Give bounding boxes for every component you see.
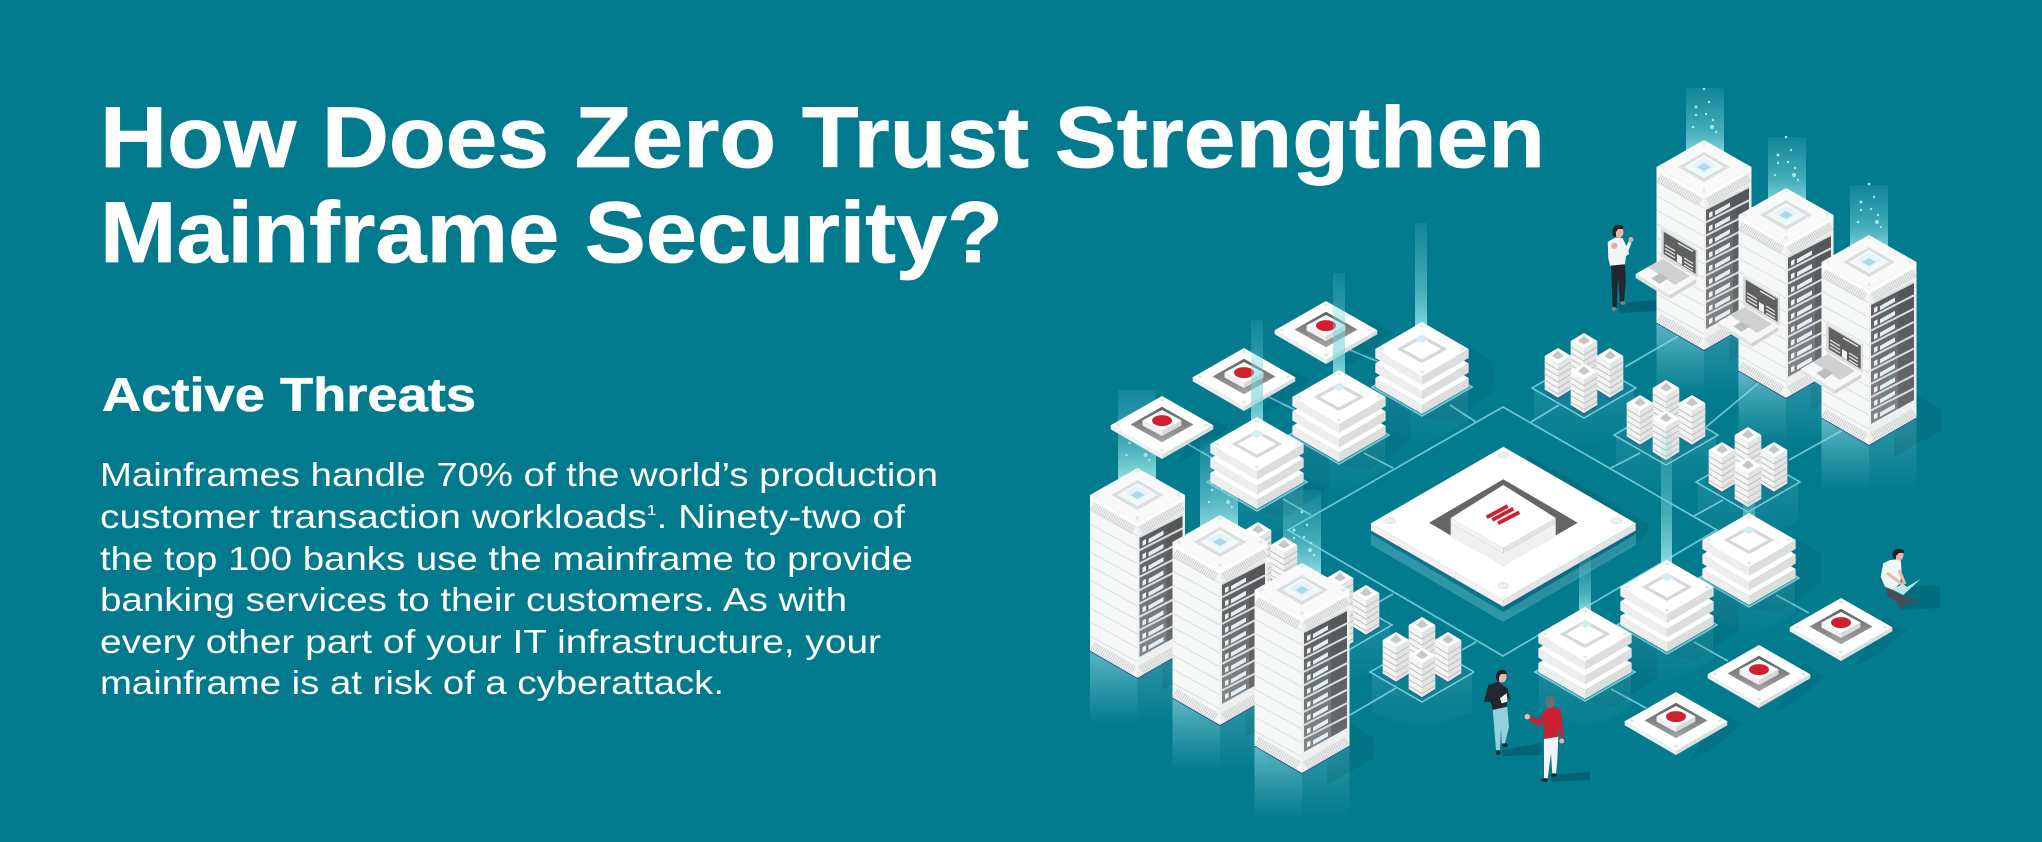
server stack E (1617, 560, 1739, 685)
mini server cluster 2 (1614, 380, 1718, 495)
light beams above right stacks (1661, 432, 1755, 567)
person in black sweater (1484, 670, 1542, 756)
title: Mainframe Security? (100, 185, 1003, 281)
body text: every other part of your IT infrastructure, your (100, 624, 881, 661)
red button tile 2 (1193, 348, 1310, 416)
title: How Does Zero Trust Strengthen (100, 90, 1545, 186)
red button tile 1 (1275, 301, 1392, 369)
mini server cluster 4 (1370, 617, 1474, 732)
body text: . Ninety-two of (656, 499, 906, 536)
light beam above stack C (1251, 320, 1263, 430)
mini server cluster 1 (1532, 333, 1636, 448)
mini server cluster 6 (1206, 522, 1310, 637)
body text (100, 457, 938, 702)
tower reflections (1090, 323, 1916, 818)
light beams above lower towers (1118, 390, 1321, 575)
red button tile 4 (1790, 598, 1907, 666)
person in red sweater (1524, 696, 1590, 782)
mini server cluster 5 (1288, 570, 1392, 685)
server tower 4 (1090, 468, 1210, 690)
red button tile 3 (1111, 396, 1228, 464)
server stack F (1535, 607, 1657, 732)
mini server cluster 3 (1696, 427, 1800, 542)
server tower 5 (1172, 515, 1292, 737)
server stack D (1699, 513, 1821, 638)
server tower 6 (1254, 563, 1374, 785)
light beam above stack B (1333, 273, 1345, 383)
server tower 2 (1718, 188, 1858, 410)
red button tile 6 (1625, 692, 1742, 760)
isometric data-center illustration (1090, 88, 1941, 818)
server stack C (1207, 417, 1329, 542)
server tower 3 (1801, 235, 1941, 457)
title (100, 90, 1545, 281)
circuit traces (1186, 335, 1843, 715)
body text: the top 100 banks use the mainframe to provide (100, 541, 913, 578)
person standing beside tower (1608, 225, 1657, 313)
central mainframe chip (1371, 447, 1650, 622)
logo: red bars (1487, 506, 1519, 523)
body text: mainframe is at risk of a cyberattack. (100, 665, 724, 702)
body text: 1 (647, 502, 656, 519)
red button tile 5 (1708, 645, 1825, 713)
seated person with laptop (1881, 549, 1940, 610)
server stack B (1289, 370, 1411, 495)
body text: Mainframes handle 70% of the world’s production (100, 457, 938, 494)
body text: banking services to their customers. As with (100, 582, 847, 619)
light beam above stack A (1415, 223, 1427, 333)
server tower 1 (1636, 140, 1776, 362)
heading: Active Threats: Active Threats (102, 368, 476, 421)
body text: customer transaction workloads (100, 499, 571, 536)
light beam above stack F (1579, 555, 1591, 615)
server stack A (1372, 322, 1494, 447)
light beams above upper towers (1686, 88, 1888, 255)
